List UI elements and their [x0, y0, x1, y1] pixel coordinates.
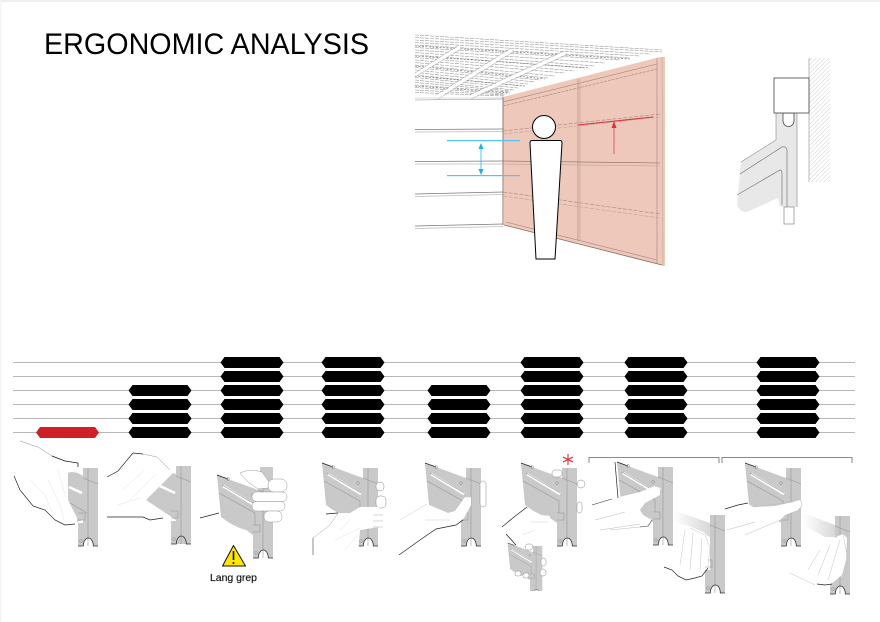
red height line	[578, 117, 653, 125]
grip 7 second view	[664, 510, 725, 593]
grip 5	[399, 463, 486, 555]
grip 7: two-hand bracket	[589, 458, 725, 593]
handle profile	[737, 113, 797, 212]
handle section detail	[737, 58, 830, 224]
bars: rating 6	[520, 357, 584, 438]
grip 8: two-hand bracket	[722, 458, 852, 594]
grid lines	[13, 362, 855, 432]
pink wall	[503, 57, 665, 266]
grip 1	[14, 441, 98, 546]
grip 3: long reach	[200, 467, 287, 584]
ceiling beams	[415, 47, 565, 97]
red bar: rating 1	[36, 427, 99, 438]
wall perspective diagram	[415, 35, 665, 266]
grip 6 inset	[508, 543, 546, 594]
warning icon	[222, 546, 246, 566]
bars: rating 6	[624, 357, 688, 438]
grip 2	[107, 453, 191, 544]
hatched wall	[809, 58, 830, 182]
bars: rating 4	[428, 385, 490, 438]
red star marker	[563, 454, 573, 465]
bars: rating 6	[220, 357, 284, 438]
ceiling grid	[415, 35, 662, 100]
warning label: Lang grep	[210, 572, 257, 584]
fingers	[240, 470, 287, 522]
bars: rating 6	[322, 357, 384, 438]
grip 8 second view	[790, 513, 850, 594]
grip 4	[313, 463, 386, 555]
bars: rating 6	[756, 357, 820, 438]
rating chart	[13, 357, 855, 438]
grip 6	[502, 454, 585, 594]
bars: rating 4	[128, 385, 192, 438]
blue reach lines	[447, 140, 520, 176]
title: ERGONOMIC ANALYSIS	[44, 28, 369, 61]
red arrow	[612, 121, 616, 154]
human figure	[530, 116, 562, 259]
left wall lines	[415, 129, 503, 228]
wall framing	[503, 57, 663, 266]
